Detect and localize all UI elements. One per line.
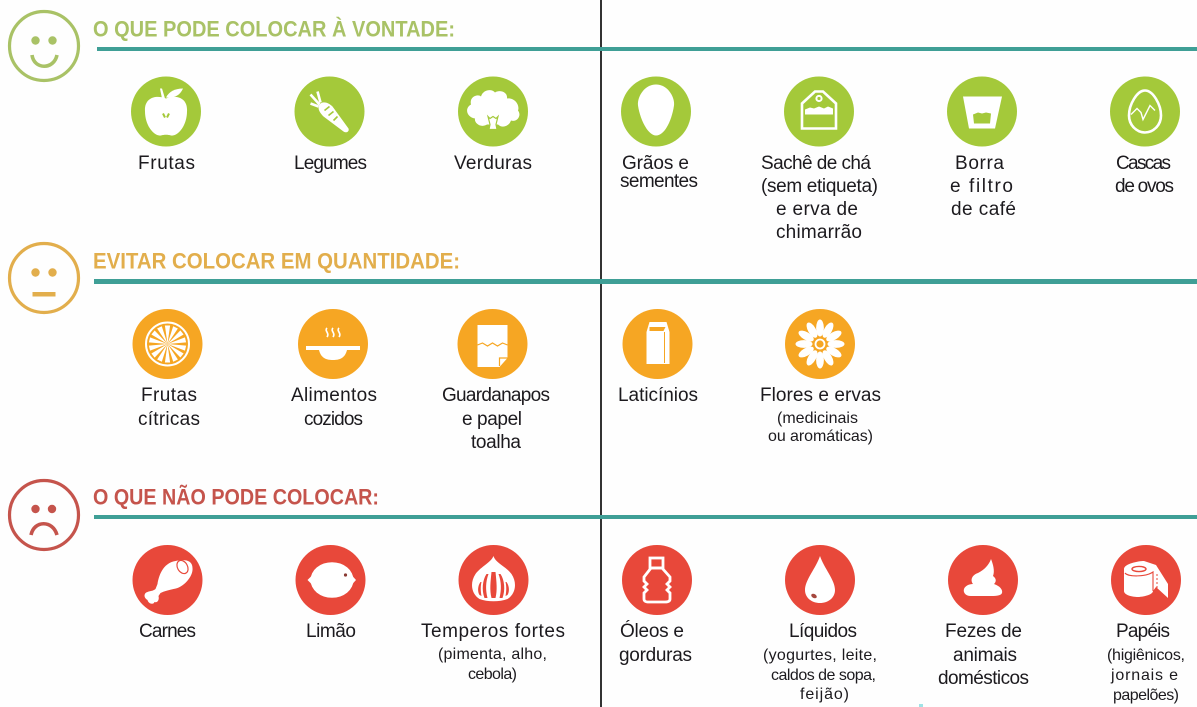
label [1107, 621, 1185, 704]
label: toalha [471, 432, 521, 453]
icon: broccoli [458, 76, 528, 146]
label: (yogurtes, leite, [763, 647, 877, 664]
label [763, 621, 877, 703]
icon: chicken leg [132, 545, 202, 615]
label: Borra [955, 153, 1004, 174]
label: Legumes [294, 153, 367, 174]
panel: section green, put freely [10, 12, 1197, 243]
label: Alimentos [291, 385, 377, 406]
icon: napkin [458, 309, 528, 379]
label: (pimenta, alho, [438, 646, 547, 663]
label [291, 385, 377, 430]
label [950, 153, 1016, 220]
item: Laticínios [618, 309, 698, 406]
icon: eggshell [1110, 76, 1180, 146]
label [619, 620, 692, 666]
panel: section orange, avoid in quantity [10, 244, 1197, 453]
icon: apple [131, 76, 201, 146]
icon: sad face [10, 480, 78, 550]
label: Carnes [139, 621, 196, 642]
label [760, 385, 881, 445]
label: Verduras [454, 153, 532, 174]
panel: section red, do not put [10, 480, 1197, 704]
label: e papel [462, 409, 522, 430]
heading: red: O QUE NÃO PODE COLOCAR: [93, 484, 379, 510]
label: Fezes de [945, 621, 1022, 642]
label [138, 385, 200, 430]
item: Borra e filtro de café [947, 76, 1017, 220]
label: cítricas [138, 409, 200, 430]
label: de ovos [1115, 176, 1174, 197]
label [938, 621, 1029, 689]
label: gorduras [619, 645, 692, 666]
label: domésticos [938, 668, 1029, 689]
label: Frutas [141, 385, 197, 406]
icon: coffee filter [947, 76, 1017, 146]
divider line orange section [94, 279, 1197, 284]
label: chimarrão [776, 222, 862, 243]
icon: citrus slice [132, 309, 202, 379]
label [761, 153, 878, 243]
label: ou aromáticas) [768, 428, 873, 445]
label: cebola) [468, 666, 517, 683]
label: Líquidos [789, 621, 857, 642]
item: Grãos e sementes [620, 76, 698, 192]
label: (sem etiqueta) [761, 176, 878, 197]
divider line green section [97, 47, 1197, 51]
item: Sachê de chá [761, 76, 878, 243]
icon: milk carton [622, 309, 692, 379]
label: feijão) [800, 686, 849, 703]
label: Papéis [1116, 621, 1170, 642]
icon: garlic [458, 545, 528, 615]
label: (higiênicos, [1107, 647, 1185, 664]
label: Flores e ervas [760, 385, 881, 406]
item: Flores e ervas [760, 309, 881, 445]
heading: orange: EVITAR COLOCAR EM QUANTIDADE: [93, 248, 460, 274]
label: Grãos e [622, 153, 689, 174]
label: e erva de [776, 199, 858, 220]
label: Sachê de chá [761, 153, 871, 174]
item: Frutas cítricas [132, 309, 202, 430]
item: Verduras [454, 76, 532, 174]
item: Líquidos [763, 545, 877, 703]
icon: toilet paper [1111, 545, 1181, 615]
icon: happy face [10, 12, 78, 80]
item: Fezes de animais domésticos [938, 545, 1029, 689]
divider line red section [94, 515, 1197, 519]
label: Óleos e [620, 620, 684, 642]
label [620, 153, 698, 192]
icon: carrot [294, 76, 364, 146]
label: sementes [620, 171, 698, 192]
label: e filtro [950, 176, 1013, 197]
label: Limão [306, 621, 356, 642]
label: de café [951, 199, 1016, 220]
item: Frutas [131, 76, 201, 174]
item: Limão [296, 545, 366, 642]
heading: green: O QUE PODE COLOCAR À VONTADE: [93, 16, 455, 42]
icon: flower [785, 309, 855, 379]
icon: steaming dish [298, 309, 368, 379]
item: Carnes [132, 545, 202, 642]
icon: neutral face [10, 244, 78, 312]
label: papelões) [1113, 687, 1179, 704]
label: Cascas [1116, 153, 1171, 174]
item: Legumes [294, 76, 367, 174]
item: Alimentos cozidos [291, 309, 377, 430]
label: caldos de sopa, [771, 667, 876, 684]
label: Temperos fortes [421, 621, 565, 642]
icon: tea bag [784, 76, 854, 146]
label [421, 621, 565, 683]
label [1115, 153, 1174, 197]
icon: lemon [296, 545, 366, 615]
item: Papéis [1107, 545, 1185, 704]
label: (medicinais [777, 410, 858, 427]
item: Temperos fortes [421, 545, 565, 683]
label: jornais e [1110, 667, 1178, 684]
label: Laticínios [618, 385, 698, 406]
icon: seed [621, 76, 691, 146]
label [442, 385, 550, 453]
item: Guardanapos e papel toalha [442, 309, 550, 453]
label: animais [953, 645, 1017, 666]
item: Óleos e gorduras [619, 545, 692, 666]
icon: droppings [948, 545, 1018, 615]
label: Frutas [138, 153, 195, 174]
item: Cascas de ovos [1110, 76, 1180, 197]
label: Guardanapos [442, 385, 550, 406]
icon: bottle [622, 545, 692, 615]
icon: drop [785, 545, 855, 615]
label: cozidos [304, 409, 363, 430]
